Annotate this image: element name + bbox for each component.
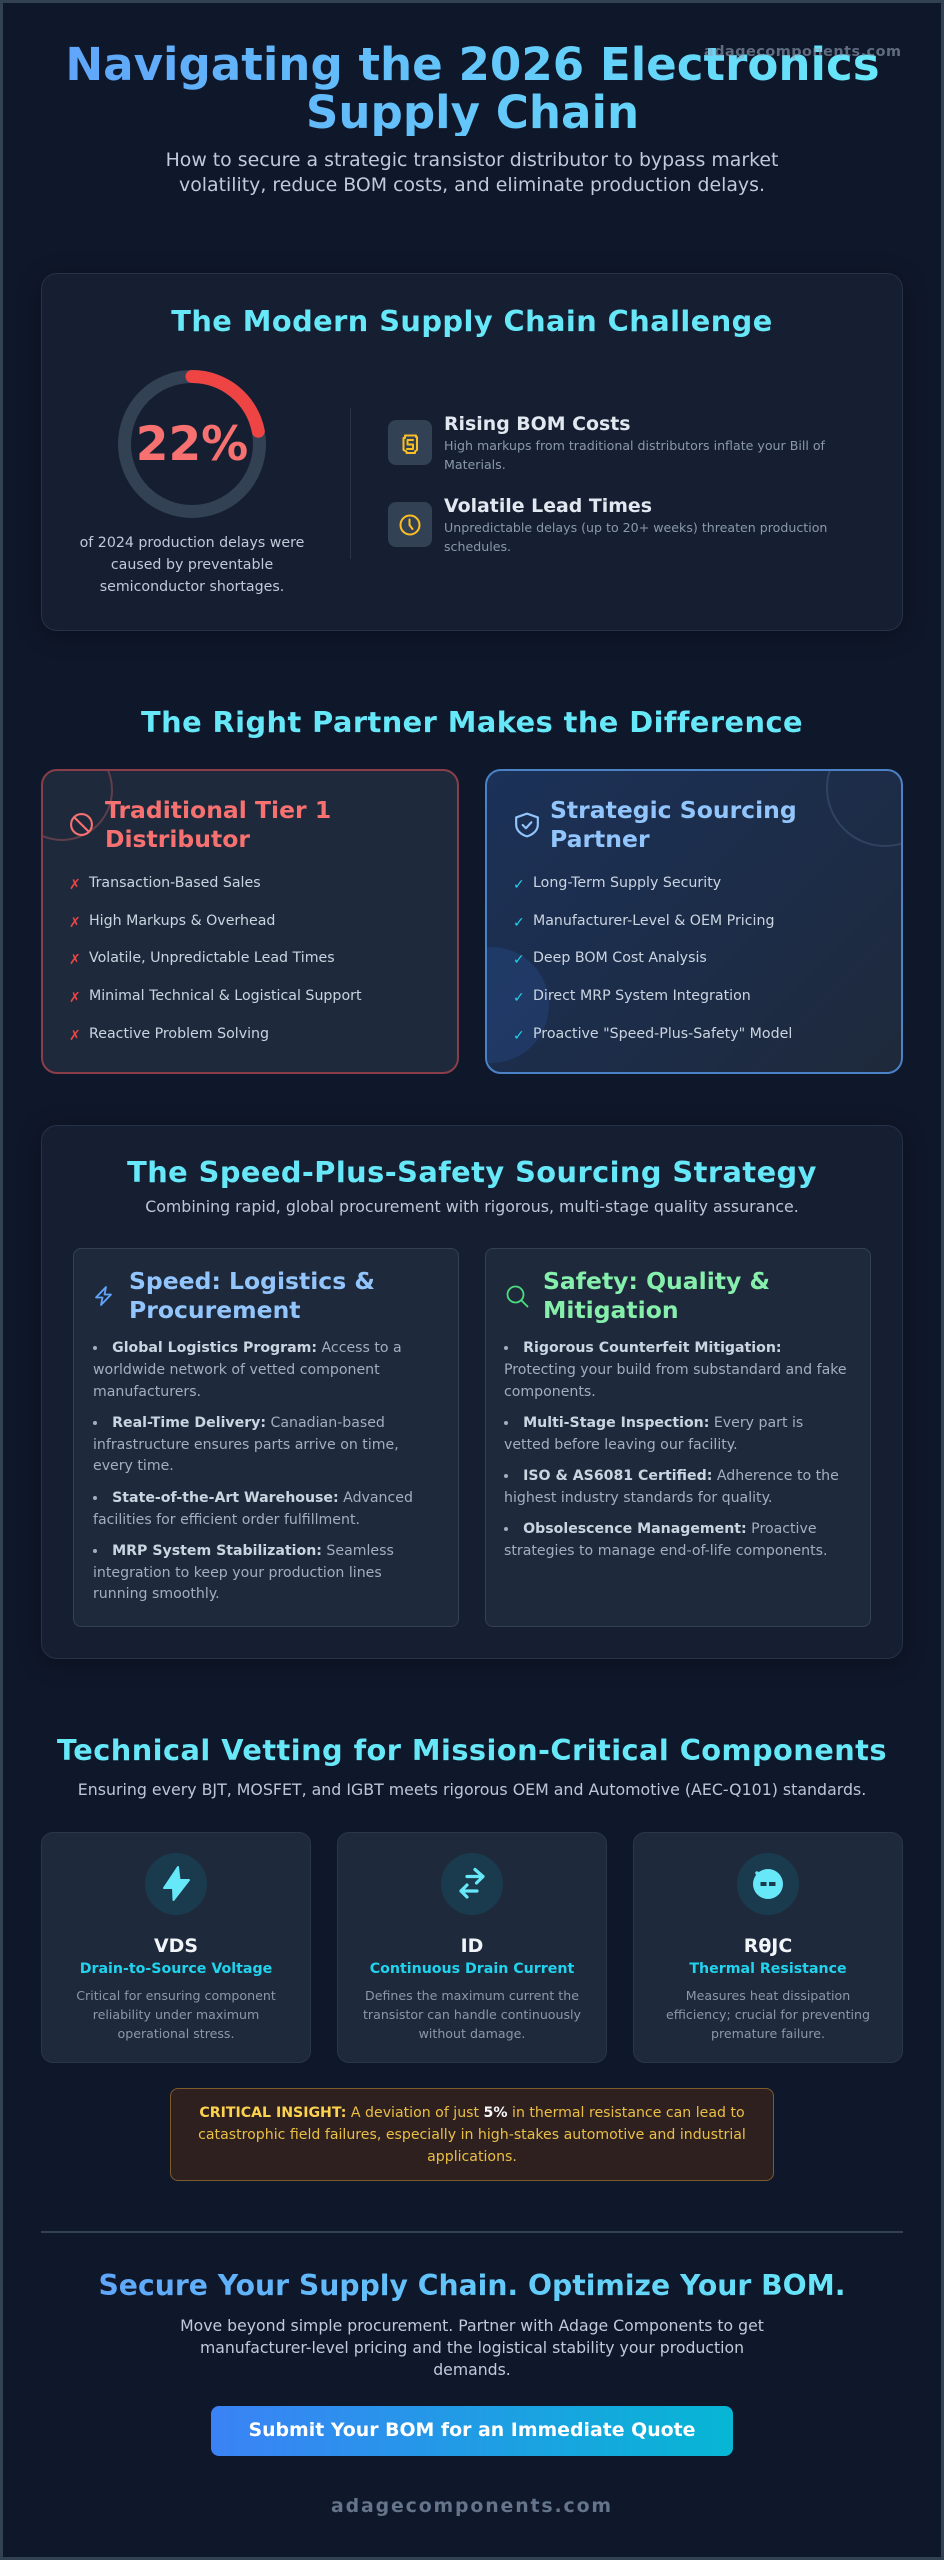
parameter description: reliability under maximum (93, 2007, 259, 2022)
parameter name: VDS (154, 1935, 198, 1957)
list: traditional drawbacks: Reactive Problem Solving (89, 1026, 269, 1042)
icon: thermal (737, 1853, 799, 1915)
icon: ban (70, 813, 93, 836)
heading: challenge: The Modern Supply Chain Challenge (171, 304, 773, 338)
card: ID (337, 1832, 607, 2063)
list: speed points: facilities for efficient order fulfillment. (93, 1512, 360, 1528)
list: traditional drawbacks: ✗ (69, 1028, 81, 1044)
parameter description: Critical for ensuring component (76, 1988, 276, 2003)
heading: right partner: The Right Partner Makes the Difference (141, 705, 803, 739)
list: strategic benefits: ✓ (513, 990, 525, 1006)
card: VDS (41, 1832, 311, 2063)
stat caption: semiconductor shortages. (100, 579, 284, 595)
stat caption: caused by preventable (111, 557, 273, 573)
parameter description: efficiency; crucial for preventing (666, 2007, 870, 2022)
heading: strategic sourcing partner (550, 796, 797, 852)
decorative ring (11, 739, 113, 841)
decorative disc (433, 947, 549, 1063)
list: strategic benefits: Proactive "Speed-Plus-Safety" Model (533, 1026, 792, 1042)
parameter description: operational stress. (118, 2026, 234, 2041)
icon: rising costs (388, 420, 432, 465)
list: traditional drawbacks: ✗ (69, 915, 81, 931)
parameter description: transistor can handle continuously (363, 2007, 581, 2022)
list: safety points: highest industry standards for quality. (504, 1490, 772, 1506)
heading: speed (129, 1267, 375, 1324)
parameter label: Thermal Resistance (689, 1961, 847, 1977)
heading: speed: Procurement (129, 1296, 301, 1324)
subheading: technical vetting: Ensuring every BJT, MOSFET, and IGBT meets rigorous OEM and Automotive (AEC-Q101) standards. (78, 1780, 866, 1799)
subtitle: volatility, reduce BOM costs, and eliminate production delays. (179, 174, 765, 196)
panel: safety (485, 1248, 871, 1627)
heading: traditional tier 1: Distributor (105, 824, 250, 852)
list: speed points: Global Logistics Program: Access to a (112, 1340, 402, 1356)
list: speed points: Real-Time Delivery: Canadian-based (112, 1415, 385, 1431)
list: speed points: State-of-the-Art Warehouse: Advanced (112, 1490, 413, 1506)
heading: safety (543, 1267, 770, 1324)
parameter description (363, 1988, 581, 2041)
icon: bolt (145, 1853, 207, 1915)
list: strategic benefits: Direct MRP System Integration (533, 988, 751, 1004)
list: strategic benefits: ✓ (513, 952, 525, 968)
list: strategic benefits: Long-Term Supply Security (533, 875, 721, 891)
icon: magnifier (506, 1286, 528, 1308)
heading: technical vetting: Technical Vetting for Mission-Critical Components (57, 1733, 887, 1767)
button: submit BOM (211, 2406, 733, 2456)
panel: speed (73, 1248, 459, 1627)
heading: safety: Safety: Quality & (543, 1267, 770, 1295)
text: rising BOM costs title: Rising BOM Costs (444, 413, 630, 435)
callout: critical insight (170, 2088, 774, 2181)
panel: strategic partner (485, 769, 903, 1074)
list: speed points: worldwide network of vetted component (93, 1362, 380, 1378)
text: lead times title: Volatile Lead Times (444, 495, 652, 517)
list: speed points: running smoothly. (93, 1586, 220, 1602)
divider (41, 2231, 903, 2233)
parameter name: RθJC (744, 1935, 792, 1957)
list: speed points: manufacturers. (93, 1384, 201, 1400)
list: traditional drawbacks: Minimal Technical & Logistical Support (89, 988, 362, 1004)
callout: critical insight: applications. (427, 2149, 517, 2165)
list: safety points: components. (504, 1384, 596, 1400)
list: strategic benefits: ✓ (513, 1028, 525, 1044)
text: lead times description (444, 520, 827, 554)
icon: lead time clock (388, 502, 432, 547)
list: strategic benefits: ✓ (513, 915, 525, 931)
stat caption (80, 535, 304, 595)
heading: speed plus safety: The Speed-Plus-Safety Sourcing Strategy (127, 1155, 817, 1189)
list: safety points (504, 1340, 847, 1559)
list: speed points: infrastructure ensures parts arrive on time, (93, 1437, 399, 1453)
parameter description: Defines the maximum current the (365, 1988, 579, 2003)
parameter name: ID (461, 1935, 483, 1957)
panel: supply chain challenge (41, 273, 903, 631)
parameter description: premature failure. (711, 2026, 825, 2041)
call to action text: demands. (433, 2360, 511, 2379)
watermark: adagecomponents.com (704, 44, 901, 60)
list: safety points: Rigorous Counterfeit Mitigation: (523, 1340, 782, 1356)
heading: traditional tier 1: Traditional Tier 1 (105, 796, 331, 824)
subtitle: How to secure a strategic transistor distributor to bypass market (166, 149, 778, 171)
list: safety points: strategies to manage end-of-life components. (504, 1543, 828, 1559)
stat: 22%: 22% (136, 417, 248, 472)
callout: critical insight: CRITICAL INSIGHT: A deviation of just 5% in thermal resistance can lead to (199, 2105, 745, 2121)
list: traditional drawbacks (69, 875, 362, 1044)
list: speed points: every time. (93, 1458, 174, 1474)
icon: swap arrows (441, 1853, 503, 1915)
subtitle (166, 149, 778, 196)
parameter description: without damage. (419, 2026, 525, 2041)
heading: strategic sourcing partner: Partner (550, 824, 650, 852)
decorative ring (826, 729, 944, 847)
list: traditional drawbacks: Volatile, Unpredictable Lead Times (89, 950, 335, 966)
icon: zap (95, 1286, 112, 1306)
heading: call to action: Secure Your Supply Chain. Optimize Your BOM. (98, 2269, 846, 2302)
list: traditional drawbacks: ✗ (69, 877, 81, 893)
button: submit BOM: Submit Your BOM for an Immediate Quote (248, 2419, 696, 2441)
list: strategic benefits: Manufacturer-Level & OEM Pricing (533, 913, 774, 929)
call to action text: Move beyond simple procurement. Partner with Adage Components to get (180, 2316, 764, 2335)
heading: traditional tier 1 (105, 796, 331, 852)
list: speed points: MRP System Stabilization: Seamless (112, 1543, 394, 1559)
list: traditional drawbacks: Transaction-Based Sales (89, 875, 261, 891)
chart: 22 percent donut (118, 370, 266, 518)
list: safety points: Protecting your build from substandard and fake (504, 1362, 847, 1378)
title: Supply Chain (306, 86, 639, 138)
parameter label: Drain-to-Source Voltage (80, 1961, 272, 1977)
heading: strategic sourcing partner: Strategic Sourcing (550, 796, 797, 824)
card: thermal resistance (633, 1832, 903, 2063)
text: rising BOM costs description (444, 438, 826, 472)
call to action text: manufacturer-level pricing and the logistical stability your production (200, 2338, 744, 2357)
heading: safety: Mitigation (543, 1296, 679, 1324)
parameter description (666, 1988, 870, 2041)
list: traditional drawbacks: ✗ (69, 952, 81, 968)
footer url: adagecomponents.com (331, 2495, 613, 2517)
text: lead times description: Unpredictable delays (up to 20+ weeks) threaten production (444, 520, 827, 535)
panel: speed plus safety strategy (41, 1125, 903, 1659)
list: strategic benefits (513, 875, 792, 1044)
list: strategic benefits: ✓ (513, 877, 525, 893)
text: lead times description: schedules. (444, 539, 511, 554)
heading: speed: Speed: Logistics & (129, 1267, 375, 1295)
list: safety points: ISO & AS6081 Certified: Adherence to the (523, 1468, 839, 1484)
text: rising BOM costs description: High markups from traditional distributors inflate your Bill of (444, 438, 825, 453)
list: safety points: Obsolescence Management: Proactive (523, 1521, 817, 1537)
list: safety points: Multi-Stage Inspection: Every part is (523, 1415, 803, 1431)
stat caption: of 2024 production delays were (80, 535, 304, 551)
parameter label: Continuous Drain Current (370, 1961, 574, 1977)
panel: traditional distributor (41, 769, 459, 1074)
icon: shield (515, 812, 539, 838)
list: traditional drawbacks: High Markups & Overhead (89, 913, 275, 929)
title (60, 41, 885, 136)
parameter description (76, 1988, 276, 2041)
subheading: speed plus safety: Combining rapid, global procurement with rigorous, multi-stage quality assurance. (145, 1197, 799, 1216)
divider: vertical (350, 408, 351, 559)
list: traditional drawbacks: ✗ (69, 990, 81, 1006)
callout: critical insight: catastrophic field failures, especially in high-stakes automotive and industrial (198, 2127, 746, 2143)
call to action text (180, 2316, 764, 2379)
parameter description: Measures heat dissipation (686, 1988, 850, 2003)
text: rising BOM costs description: Materials. (444, 457, 506, 472)
list: safety points: vetted before leaving our facility. (504, 1437, 738, 1453)
title: Navigating the 2026 Electronics (65, 38, 880, 91)
list: speed points (93, 1340, 413, 1602)
list: speed points: integration to keep your production lines (93, 1565, 382, 1581)
list: strategic benefits: Deep BOM Cost Analysis (533, 950, 707, 966)
